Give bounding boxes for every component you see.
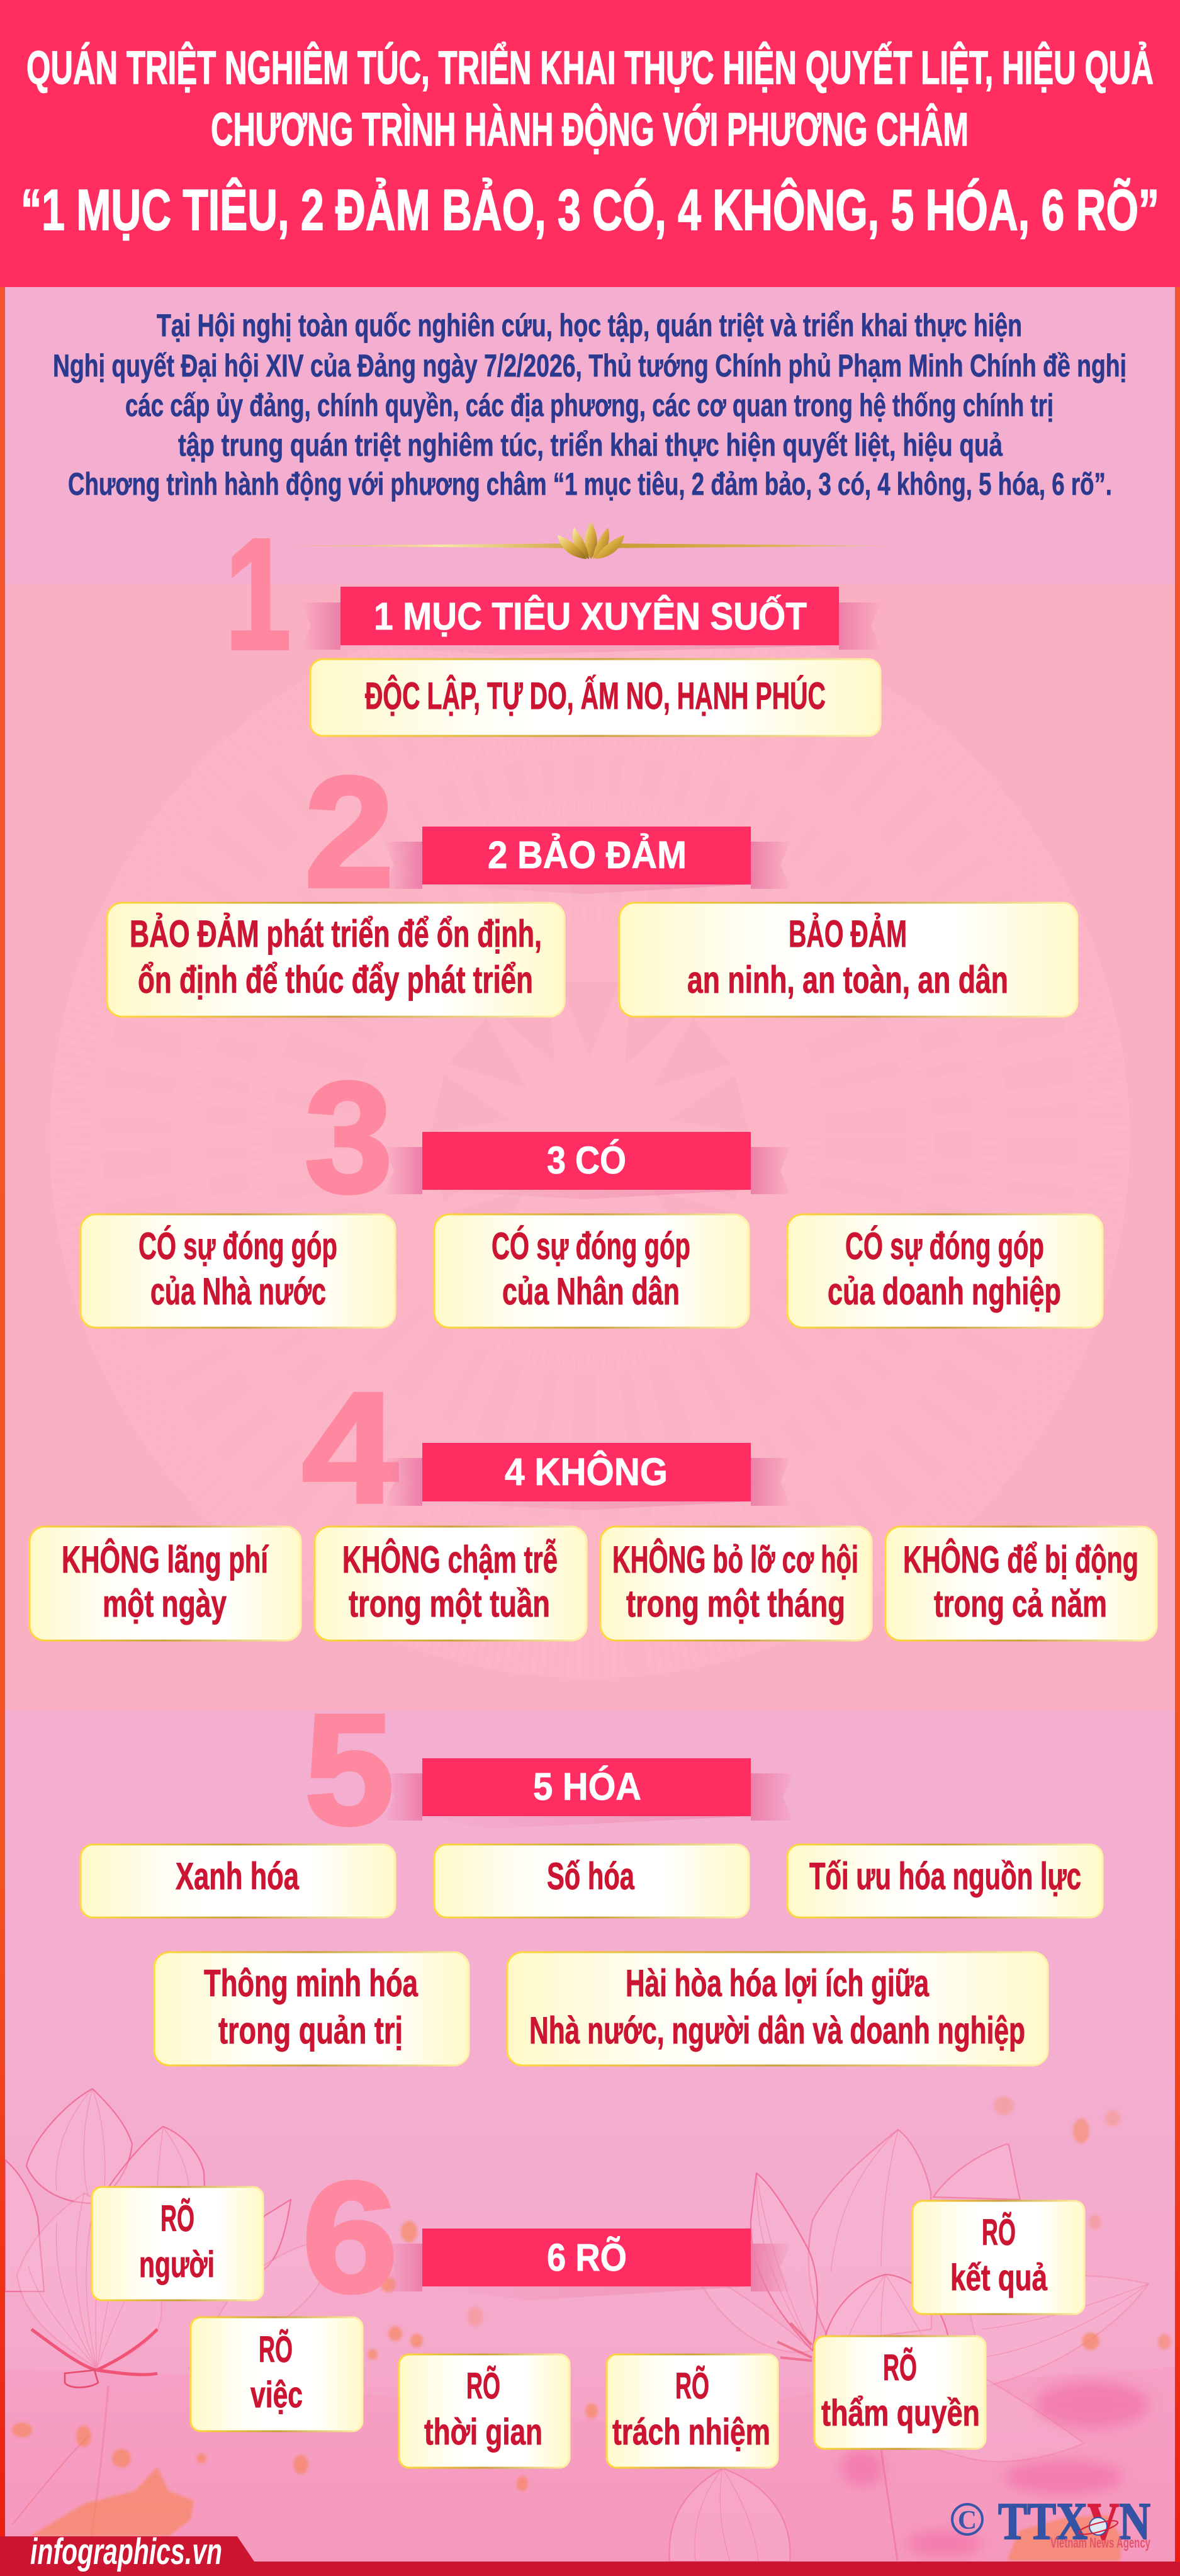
section 4: 4 không (30, 1360, 1157, 1641)
banner 1: 1 MỤC TIÊU XUYÊN SUỐT (374, 595, 807, 638)
card: rõ kết quả (913, 2201, 1084, 2314)
background: right lotus (692, 2130, 1149, 2561)
card: lãng phí (30, 1527, 301, 1641)
card: rõ kết quả: RÕ (982, 2212, 1016, 2253)
card: lãng phí: KHÔNG lãng phí (62, 1539, 269, 1581)
card: xanh hóa: Xanh hóa (176, 1855, 299, 1897)
card: tối ưu hóa nguồn lực (787, 1844, 1103, 1918)
footer bar (0, 2531, 1180, 2576)
card: bỏ lỡ cơ hội: KHÔNG bỏ lỡ cơ hội (612, 1539, 858, 1581)
copyright mark (952, 2504, 982, 2535)
card: rõ thẩm quyền: RÕ (883, 2347, 917, 2388)
card: bỏ lỡ cơ hội: trong một tháng (626, 1583, 845, 1625)
section 2: 2 bảo đảm (107, 744, 1077, 1017)
globe (1077, 2517, 1119, 2537)
card: rõ việc: việc (250, 2375, 303, 2415)
header banner (0, 0, 1180, 287)
background: lower centre lotus (670, 2468, 790, 2562)
card: độc lập: ĐỘC LẬP, TỰ DO, ẤM NO, HẠNH PHÚC (365, 675, 826, 717)
gold lotus divider (286, 522, 911, 559)
card: bảo đảm an ninh: BẢO ĐẢM (789, 913, 907, 955)
copyright mark: C (958, 2506, 977, 2535)
big numeral 5: 5 (305, 1681, 394, 1857)
card: số hóa (434, 1844, 749, 1918)
banner 5: 5 HÓA (533, 1765, 641, 1808)
banner 6: 6 RÕ (547, 2236, 627, 2279)
big numeral 3: 3 (305, 1049, 393, 1225)
background: left lotus (5, 2089, 329, 2536)
card: lãng phí: một ngày (103, 1583, 227, 1625)
TTXVN wordmark: TTXVN (998, 2492, 1150, 2551)
card: số hóa: Số hóa (547, 1855, 634, 1897)
banner 1 (301, 587, 881, 655)
card: doanh nghiệp (787, 1214, 1103, 1328)
card: bảo đảm an ninh (619, 903, 1077, 1017)
card: rõ trách nhiệm: RÕ (675, 2366, 709, 2407)
card: doanh nghiệp: CÓ sự đóng góp (845, 1225, 1044, 1267)
card: bảo đảm phát triển: ổn định để thúc đẩy phát triển (138, 959, 533, 1001)
banner 2: 2 BẢO ĐẢM (488, 833, 687, 876)
banner 6 (384, 2229, 790, 2300)
banner 3 (384, 1132, 790, 1199)
card: rõ thẩm quyền (814, 2336, 986, 2449)
card: thông minh hóa: Thông minh hóa (204, 1962, 418, 2004)
section 1: 1 mục tiêu (225, 506, 881, 736)
card: nhân dân: của Nhân dân (502, 1270, 680, 1313)
card: hài hòa hóa lợi ích (507, 1952, 1048, 2065)
card: rõ trách nhiệm: trách nhiệm (612, 2412, 770, 2453)
card: rõ thẩm quyền: thẩm quyền (821, 2393, 980, 2434)
big numeral 2: 2 (305, 744, 394, 920)
card: rõ người: người (139, 2244, 215, 2285)
card: doanh nghiệp: của doanh nghiệp (828, 1270, 1061, 1313)
footer site name: infographics.vn (30, 2531, 222, 2572)
card: rõ người (92, 2187, 263, 2300)
card: nhà nước: của Nhà nước (150, 1270, 326, 1313)
card: rõ việc (191, 2317, 362, 2431)
card: nhà nước (81, 1214, 395, 1328)
card: độc lập (310, 659, 880, 736)
section 3: 3 có (81, 1049, 1103, 1328)
card: bảo đảm phát triển (107, 903, 565, 1017)
card: bảo đảm an ninh: an ninh, an toàn, an dân (687, 959, 1008, 1001)
card: xanh hóa (81, 1844, 395, 1918)
card: bị động (885, 1527, 1157, 1641)
card: rõ trách nhiệm (607, 2354, 778, 2468)
section 5: 5 hóa (81, 1681, 1103, 2065)
card: bỏ lỡ cơ hội (600, 1527, 872, 1641)
big numeral 1: 1 (225, 506, 291, 682)
intro text block (53, 308, 1127, 502)
card: bị động: trong cả năm (934, 1583, 1107, 1625)
card: bảo đảm phát triển: BẢO ĐẢM phát triển để ổn định, (130, 913, 542, 955)
card: rõ thời gian (399, 2354, 570, 2468)
card: hài hòa hóa lợi ích: Hài hòa hóa lợi ích giữa (626, 1962, 929, 2004)
card: thông minh hóa: trong quản trị (218, 2009, 403, 2052)
card: rõ thời gian: thời gian (424, 2412, 542, 2453)
section 6: 6 rõ (92, 2149, 1084, 2468)
card: nhân dân (434, 1214, 749, 1328)
card: rõ kết quả: kết quả (950, 2257, 1048, 2298)
card: rõ người: RÕ (160, 2198, 194, 2239)
card: chậm trễ: trong một tuần (349, 1583, 550, 1625)
card: rõ việc: RÕ (259, 2329, 293, 2370)
banner 4 (384, 1443, 790, 1510)
card: thông minh hóa (154, 1952, 469, 2065)
card: nhà nước: CÓ sự đóng góp (138, 1225, 337, 1267)
big numeral 6: 6 (302, 2149, 398, 2325)
big numeral 4: 4 (302, 1360, 398, 1535)
background: ink splashes (12, 2096, 1171, 2561)
background: bronze drum motif (50, 598, 1130, 1678)
banner 3: 3 CÓ (547, 1139, 626, 1182)
banner 5 (384, 1758, 793, 1829)
banner 4: 4 KHÔNG (505, 1450, 668, 1493)
banner 2 (384, 827, 790, 894)
logo: TTXVN (952, 2492, 1150, 2551)
card: chậm trễ: KHÔNG chậm trễ (342, 1539, 558, 1581)
card: chậm trễ (315, 1527, 587, 1641)
card: nhân dân: CÓ sự đóng góp (492, 1225, 690, 1267)
card: rõ thời gian: RÕ (466, 2366, 500, 2407)
